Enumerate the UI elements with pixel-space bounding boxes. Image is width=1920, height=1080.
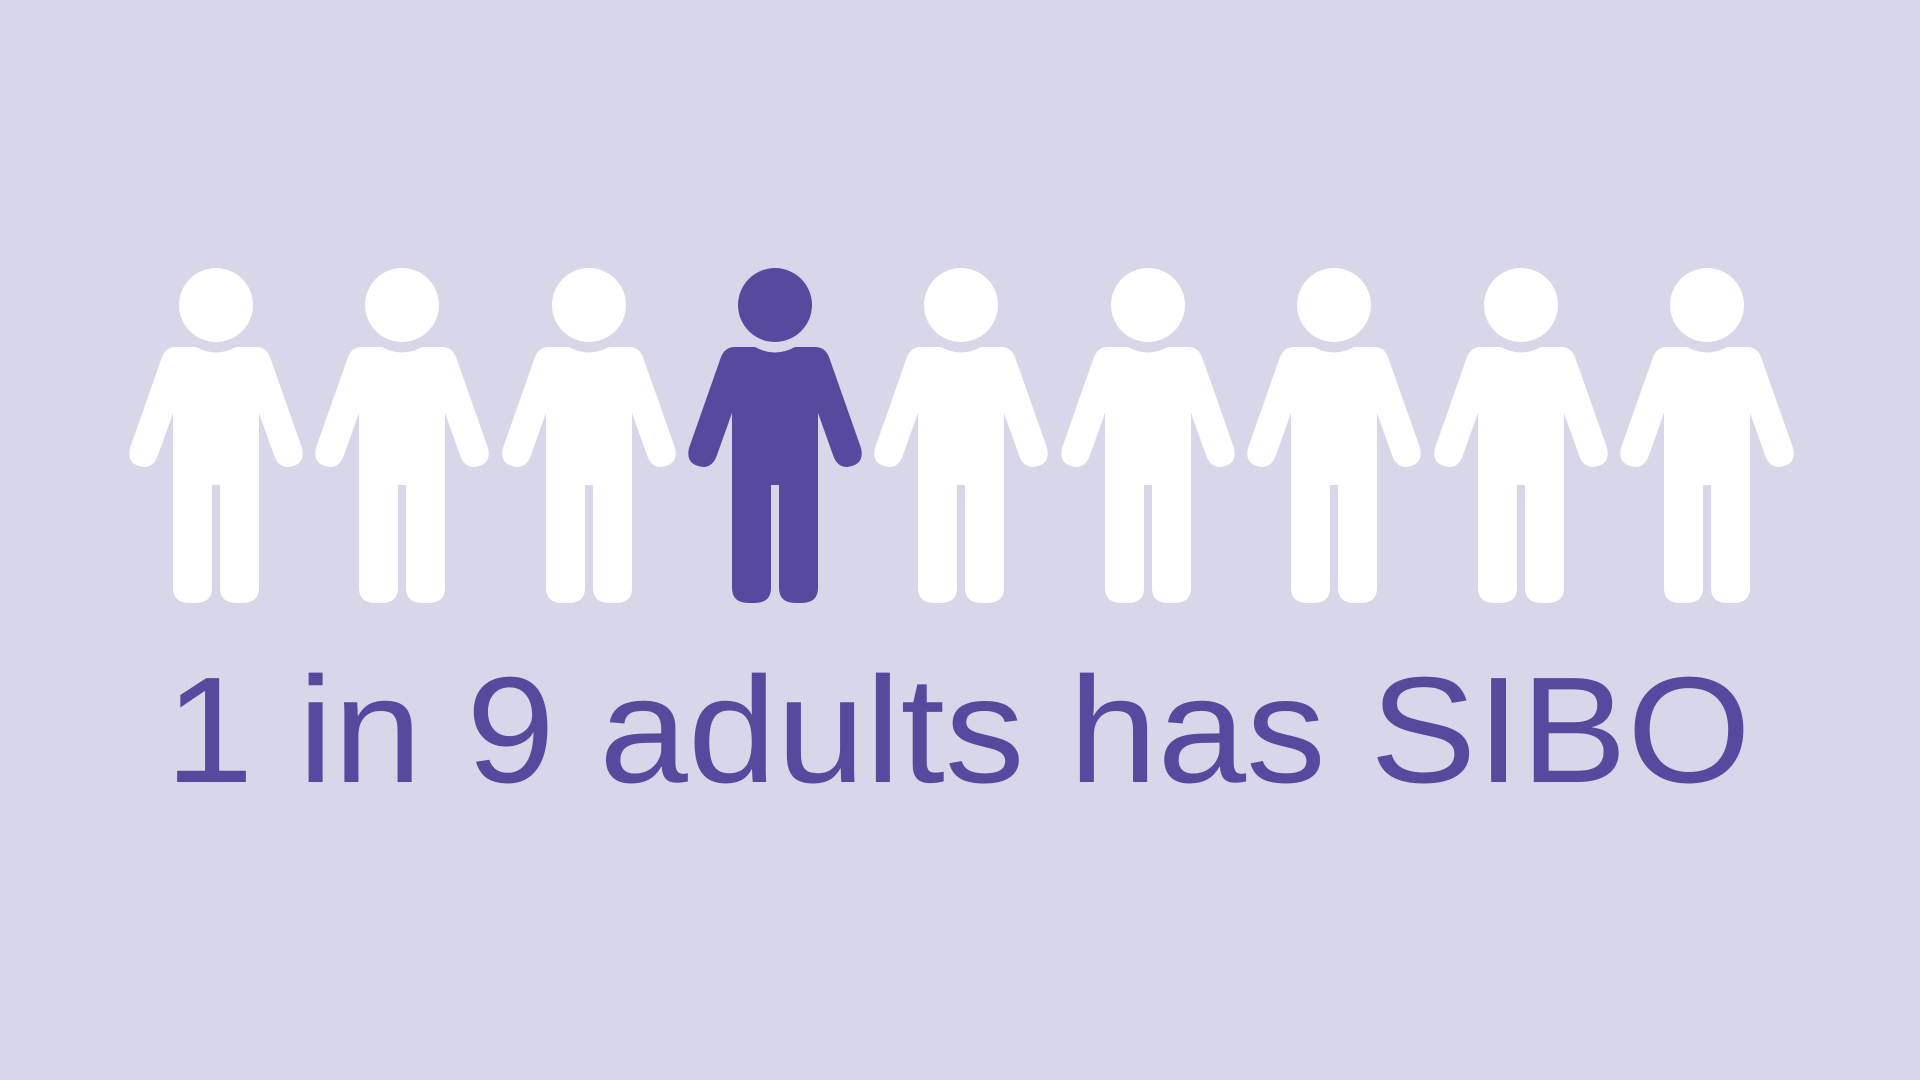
icon: person 9 — [1620, 268, 1794, 603]
icon: person 7 — [1247, 268, 1421, 603]
icon row: 9 people — [129, 268, 1794, 603]
icon: person 3 — [502, 268, 676, 603]
icon: person 8 — [1434, 268, 1608, 603]
icon: person 2 — [315, 268, 489, 603]
caption: 1 in 9 adults has SIBO: 1 in 9 adults has SIBO — [165, 645, 1751, 814]
icon: person 6 — [1061, 268, 1235, 603]
icon: person 1 — [129, 268, 303, 603]
icon: person 5 — [874, 268, 1048, 603]
icon: person 4 highlighted — [688, 268, 862, 603]
